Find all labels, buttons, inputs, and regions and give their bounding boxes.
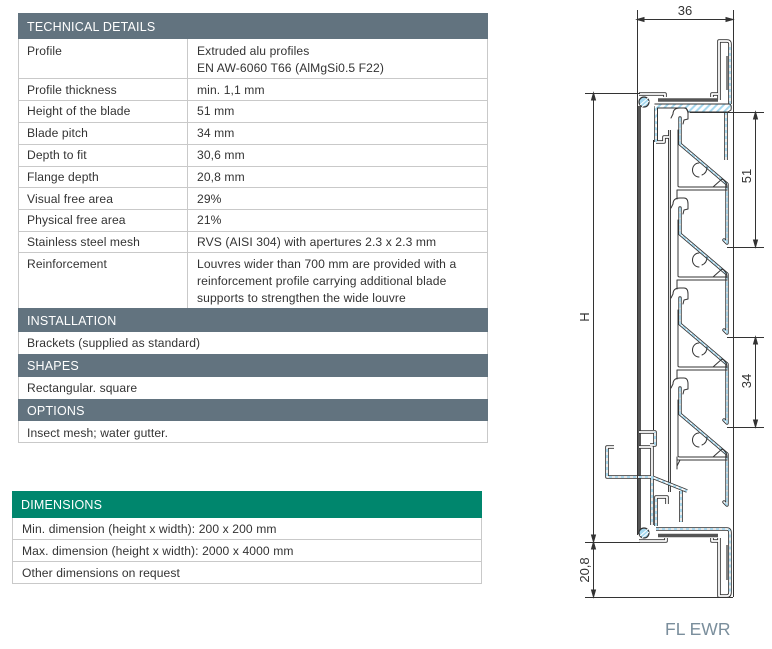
row: profile thickness: min. 1,1 mm bbox=[197, 83, 265, 97]
dimension: 20,8: 20,8 bbox=[577, 557, 592, 583]
row: other dimensions: Other dimensions on request bbox=[22, 566, 180, 580]
top profile bbox=[639, 41, 731, 160]
heading: technical details: TECHNICAL DETAILS bbox=[27, 20, 155, 34]
dimension: 34: 34 bbox=[739, 374, 754, 388]
heading: shapes: SHAPES bbox=[27, 359, 79, 373]
row: reinforcement: Reinforcement bbox=[27, 257, 107, 271]
row: blade pitch: Blade pitch bbox=[27, 126, 88, 140]
row: reinforcement: supports to strengthen the wide louvre bbox=[197, 291, 406, 305]
heading: options: OPTIONS bbox=[27, 404, 85, 418]
row: reinforcement bbox=[27, 257, 456, 305]
heading: dimensions bbox=[12, 491, 482, 518]
heading: options bbox=[18, 399, 488, 421]
row: min dimension: Min. dimension (height x width): 200 x 200 mm bbox=[22, 522, 277, 536]
heading: installation bbox=[18, 308, 488, 332]
row: blade pitch bbox=[27, 126, 234, 140]
row: height of the blade: Height of the blade bbox=[27, 104, 130, 118]
row: height of the blade bbox=[27, 104, 234, 118]
row: visual free area bbox=[27, 192, 222, 206]
row: profile: Profile bbox=[27, 44, 62, 58]
row: brackets: Brackets (supplied as standard) bbox=[27, 336, 200, 350]
row: profile: Extruded alu profiles bbox=[197, 44, 309, 58]
row: physical free area: 21% bbox=[197, 213, 222, 227]
dimension: 36: 36 bbox=[678, 3, 692, 18]
louvre blades bbox=[671, 108, 727, 505]
heading: shapes bbox=[18, 354, 488, 377]
row: stainless steel mesh: RVS (AISI 304) with apertures 2.3 x 2.3 mm bbox=[197, 235, 436, 249]
row: profile thickness bbox=[27, 83, 265, 97]
bottom profile and bracket bbox=[607, 432, 730, 596]
dimension: 51: 51 bbox=[739, 169, 754, 183]
row: blade pitch: 34 mm bbox=[197, 126, 234, 140]
product label: FL EWR: FL EWR bbox=[665, 619, 730, 639]
row: flange depth bbox=[27, 170, 245, 184]
frame verticals bbox=[640, 106, 670, 534]
row: options text: Insect mesh; water gutter. bbox=[27, 426, 168, 440]
row: stainless steel mesh bbox=[27, 235, 436, 249]
row: profile bbox=[27, 44, 384, 75]
heading: technical details bbox=[18, 13, 488, 39]
row: profile: EN AW-6060 T66 (AlMgSi0.5 F22) bbox=[197, 61, 384, 75]
row: physical free area bbox=[27, 213, 222, 227]
panel: dimensions table bbox=[12, 491, 482, 584]
row: depth to fit: Depth to fit bbox=[27, 148, 87, 162]
row: profile thickness: Profile thickness bbox=[27, 83, 117, 97]
row: height of the blade: 51 mm bbox=[197, 104, 234, 118]
row: reinforcement: Louvres wider than 700 mm are provided with a bbox=[197, 257, 456, 271]
row: reinforcement: reinforcement profile carrying additional blade bbox=[197, 274, 446, 288]
heading: dimensions: DIMENSIONS bbox=[21, 498, 102, 512]
row: visual free area: Visual free area bbox=[27, 192, 113, 206]
panel: technical details table bbox=[18, 13, 488, 443]
dimension: H: H bbox=[577, 312, 592, 322]
row: rectangular: Rectangular. square bbox=[27, 381, 137, 395]
heading: installation: INSTALLATION bbox=[27, 314, 116, 328]
row: max dimension: Max. dimension (height x width): 2000 x 4000 mm bbox=[22, 544, 294, 558]
dimension lines bbox=[585, 10, 764, 598]
row: visual free area: 29% bbox=[197, 192, 222, 206]
row: flange depth: 20,8 mm bbox=[197, 170, 245, 184]
row: physical free area: Physical free area bbox=[27, 213, 126, 227]
row: stainless steel mesh: Stainless steel mesh bbox=[27, 235, 140, 249]
row: depth to fit bbox=[27, 148, 245, 162]
row: depth to fit: 30,6 mm bbox=[197, 148, 245, 162]
row: flange depth: Flange depth bbox=[27, 170, 99, 184]
